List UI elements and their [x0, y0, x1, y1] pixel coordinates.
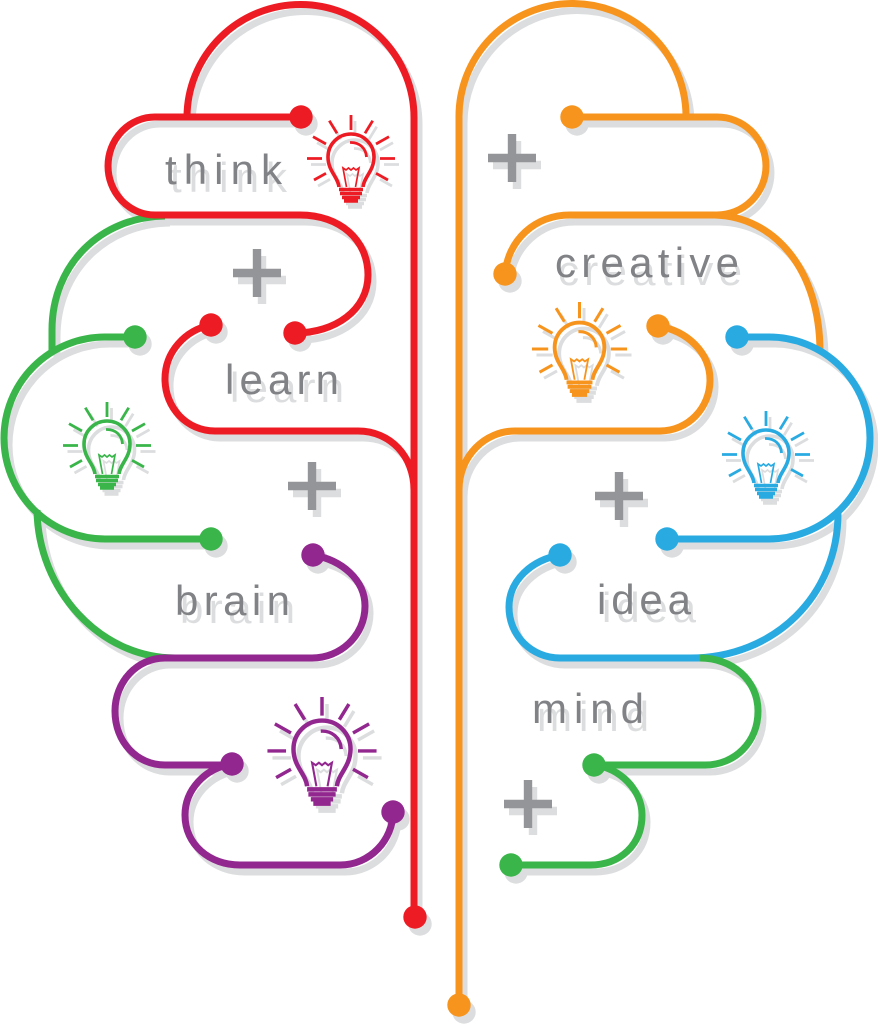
blue line	[509, 325, 870, 658]
icon: green light bulb	[63, 402, 156, 494]
label: learn: learn	[225, 356, 339, 403]
plus sign 1	[233, 249, 286, 304]
red line	[108, 4, 427, 929]
icon: red light bulb	[307, 115, 399, 207]
label: think: think	[165, 146, 283, 193]
orange line	[447, 3, 820, 1017]
label: creative: creative	[558, 247, 742, 294]
icon: blue light bulb	[722, 411, 814, 503]
label: idea: idea	[602, 584, 697, 631]
label: mind: mind	[532, 685, 644, 732]
plus sign 5	[504, 780, 557, 835]
label: think: think	[170, 154, 288, 201]
purple line	[115, 543, 405, 865]
left upper green line	[4, 216, 223, 658]
icon: purple light bulb	[267, 697, 382, 811]
plus sign 3	[488, 134, 541, 189]
right lower green line	[499, 658, 758, 877]
label: creative: creative	[555, 239, 739, 286]
label: brain: brain	[180, 585, 295, 632]
plus sign 4	[595, 472, 648, 527]
label: mind: mind	[537, 693, 649, 740]
icon: orange light bulb	[532, 302, 632, 401]
label: learn: learn	[230, 364, 344, 411]
label: idea: idea	[597, 576, 692, 623]
label: brain: brain	[175, 577, 290, 624]
plus sign 2	[288, 462, 341, 517]
